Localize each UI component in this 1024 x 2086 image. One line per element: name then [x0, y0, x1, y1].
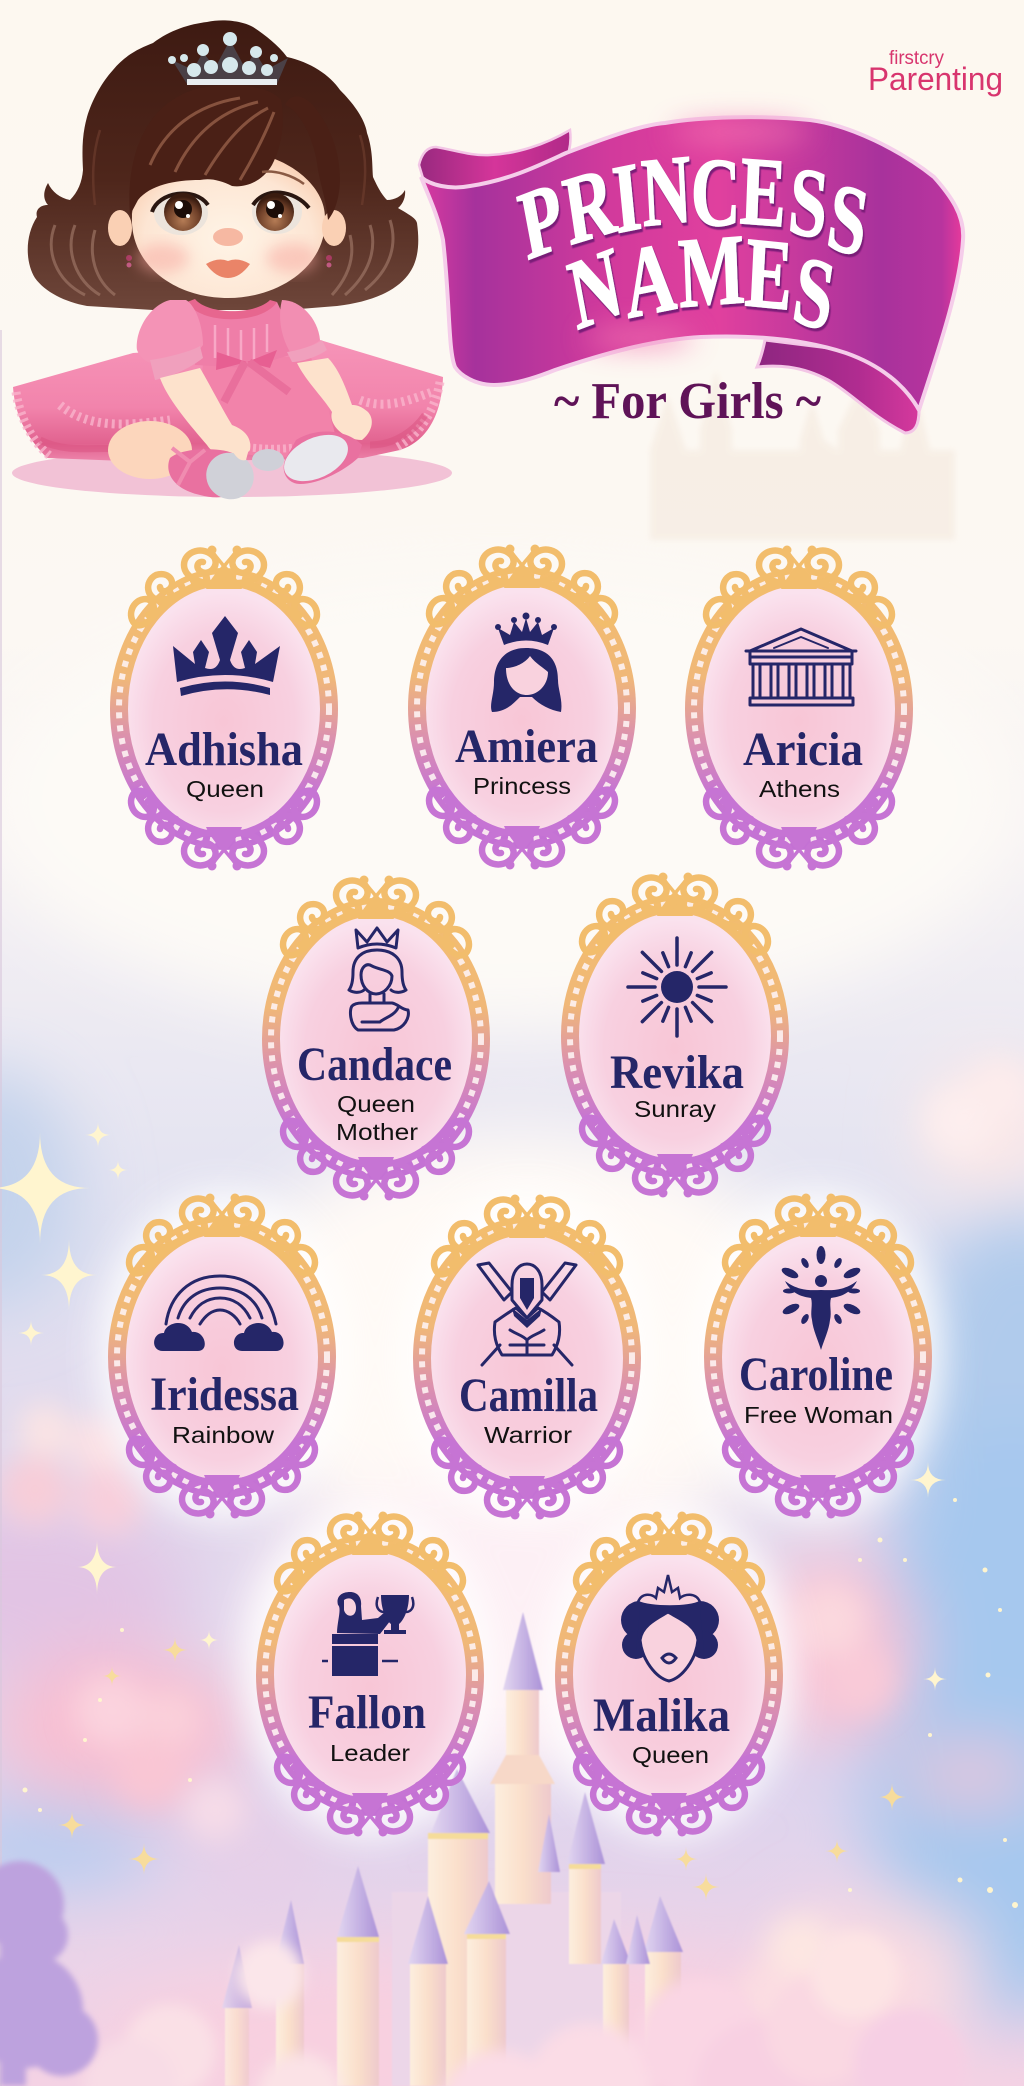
heading: PRINCESS NAMES: NAMES	[561, 213, 841, 353]
tiara	[168, 32, 288, 85]
icon: queen mother	[349, 928, 408, 1030]
title banner	[419, 117, 963, 433]
icon: free woman with leaves	[780, 1246, 862, 1350]
meaning: Princess	[473, 773, 571, 799]
icon: armoured warrior with swords	[478, 1263, 576, 1365]
ground shadow	[12, 449, 452, 497]
banner back tail right	[757, 340, 925, 433]
eyes	[152, 190, 309, 235]
castle	[222, 1612, 683, 2086]
name: Amiera	[455, 720, 598, 773]
faint castle behind banner	[650, 370, 955, 540]
legs	[108, 421, 192, 479]
name: Iridessa	[150, 1368, 299, 1421]
meaning: Sunray	[634, 1096, 717, 1122]
logo: FirstCry Parenting: Parenting	[868, 61, 1003, 97]
face	[132, 150, 325, 298]
banner back fold left	[419, 130, 571, 195]
name: Camilla	[459, 1369, 598, 1422]
bangs	[129, 85, 340, 220]
name card: Camilla	[422, 1194, 632, 1520]
nose	[213, 228, 243, 246]
name: Aricia	[743, 723, 863, 776]
meaning: Free Woman	[744, 1402, 893, 1428]
logo: FirstCry Parenting: firstcry	[889, 48, 944, 69]
icon: crown	[173, 616, 280, 696]
ears and earrings	[108, 210, 346, 268]
hair strands	[51, 130, 393, 295]
stars and sparkles	[0, 1122, 1018, 1908]
hair back	[28, 20, 418, 310]
name card: Malika	[564, 1512, 774, 1836]
grey shoe middle	[252, 449, 284, 471]
name card: Candace: Mother	[336, 1119, 418, 1145]
clouds in front of castle	[84, 1931, 966, 2086]
mouth	[206, 260, 250, 278]
left shoe	[168, 444, 262, 508]
name: Candace	[297, 1038, 452, 1091]
meaning: Leader	[330, 1740, 410, 1766]
icon: sun	[628, 938, 726, 1036]
cloud lobes	[1, 1060, 1024, 2036]
meaning: Queen	[186, 776, 264, 802]
name: Malika	[593, 1689, 730, 1742]
heading: PRINCESS NAMES: PRINCESS	[512, 136, 874, 281]
meaning: Athens	[759, 776, 840, 802]
icon: queen with tiara and hair buns	[621, 1575, 719, 1681]
illustration: baby girl with tiara	[12, 20, 452, 508]
cheeks	[137, 243, 318, 273]
name: Revika	[610, 1046, 744, 1099]
meaning: Rainbow	[172, 1422, 274, 1448]
name card: Aricia	[694, 546, 904, 870]
banner main ribbon	[421, 117, 963, 410]
name card: Amiera	[417, 544, 627, 870]
banner highlights	[585, 122, 810, 348]
name card: Candace	[271, 876, 481, 1200]
icon: princess with crown	[491, 612, 561, 712]
hand over shoe	[212, 432, 250, 460]
bodice	[190, 302, 300, 368]
name: Fallon	[308, 1686, 426, 1739]
name card: Fallon	[265, 1512, 475, 1836]
skirt front	[202, 355, 338, 457]
arms	[160, 368, 250, 457]
meaning: Queen	[632, 1742, 709, 1768]
icon: leader holding trophy	[322, 1592, 413, 1676]
name: Caroline	[739, 1348, 893, 1401]
name card: Revika	[570, 872, 780, 1198]
meaning: Queen	[337, 1091, 415, 1117]
meaning: Warrior	[484, 1422, 572, 1448]
icon: greek temple	[746, 629, 856, 705]
brows	[262, 172, 304, 184]
bow	[216, 350, 277, 370]
collar	[187, 299, 277, 319]
name card: Adhisha	[119, 546, 329, 870]
icon: rainbow and clouds	[154, 1276, 284, 1351]
subheading: For Girls: ~ For Girls ~	[554, 373, 821, 430]
right shoe	[277, 426, 362, 490]
heading: PRINCESS NAMES	[512, 136, 874, 353]
name: Adhisha	[145, 723, 303, 776]
purple trees	[0, 1861, 98, 2086]
sleeves	[137, 300, 327, 380]
name card: Iridessa	[117, 1194, 327, 1518]
name card: Caroline	[713, 1194, 923, 1518]
tutu skirt	[13, 340, 443, 462]
